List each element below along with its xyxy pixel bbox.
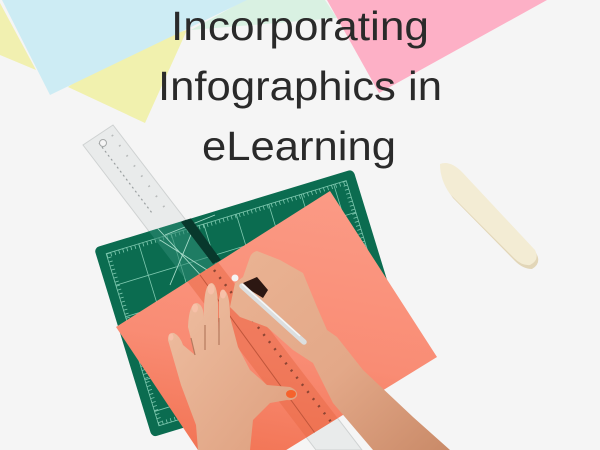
- salmon paper sheet: [116, 191, 437, 450]
- bone folder tool: [440, 163, 538, 269]
- ruler over the paper: [188, 262, 338, 438]
- ruler markings: [99, 143, 152, 213]
- pink paper: [327, 0, 547, 93]
- title line 1: Incorporating: [171, 3, 429, 49]
- finger gaps: [191, 318, 219, 355]
- mint paper: [191, 0, 337, 30]
- title line 2: Infographics in: [158, 63, 442, 109]
- left hand: [168, 283, 297, 450]
- gap between fingers: [243, 277, 268, 298]
- cutting mat: [94, 169, 411, 437]
- ruler dark stripe over mat: [181, 217, 221, 264]
- fingernails: [168, 284, 226, 340]
- orange thumbnail: [286, 390, 296, 398]
- pen tip: [232, 274, 238, 282]
- ruler seen through over the mat: [148, 214, 221, 286]
- clear ruler: [83, 125, 362, 450]
- coloured papers: [0, 0, 547, 123]
- ruler hole: [100, 140, 106, 146]
- small yellow paper: [0, 3, 36, 70]
- pen: [232, 274, 304, 342]
- blue paper: [2, 0, 247, 95]
- right hand and arm: [230, 251, 450, 450]
- large yellow paper: [68, 30, 187, 123]
- title line 3: eLearning: [202, 123, 396, 169]
- title: [158, 3, 442, 169]
